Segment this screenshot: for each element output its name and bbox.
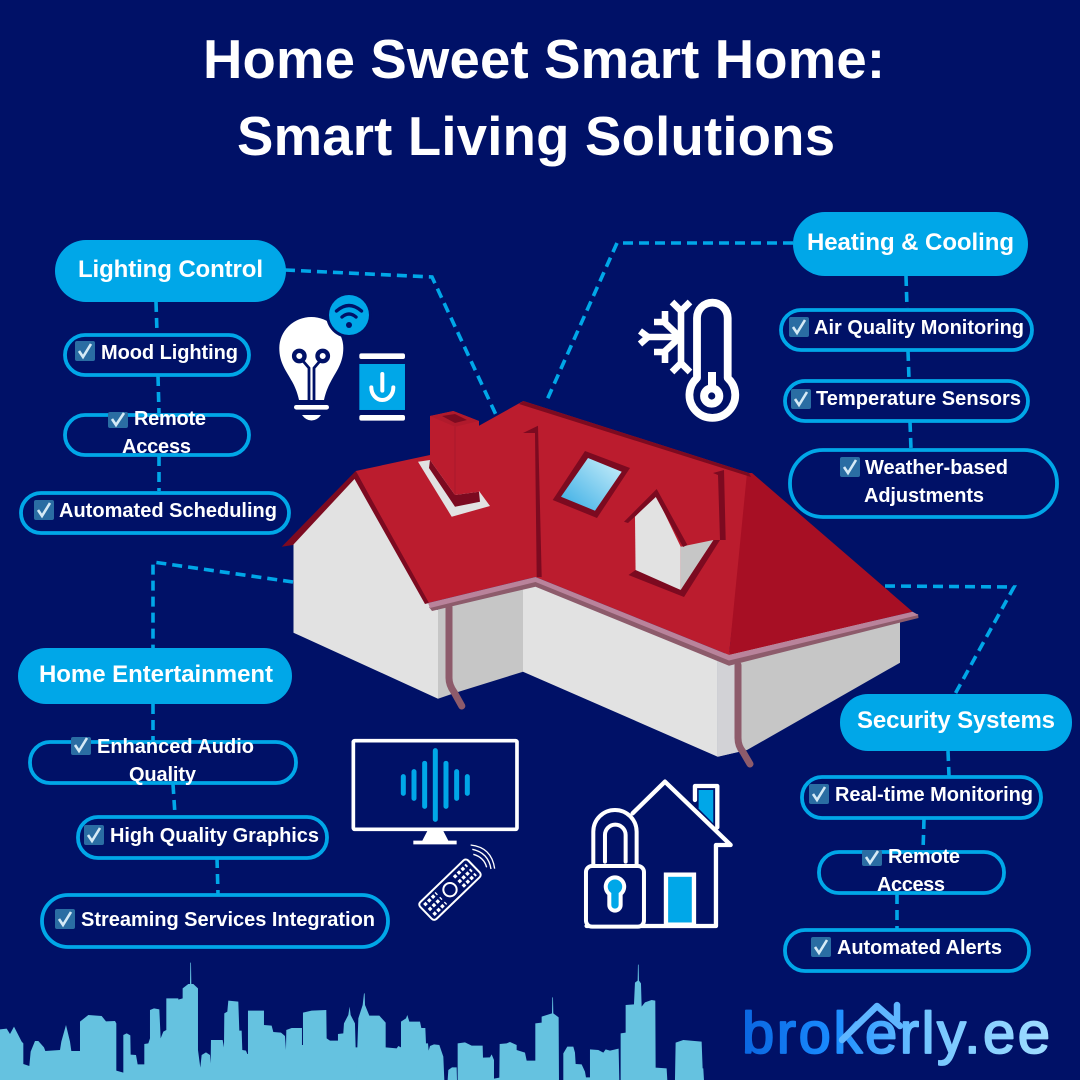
heading: lighting control — [55, 240, 286, 302]
left gable wall — [294, 476, 438, 699]
item: remote access: Remote — [888, 846, 960, 868]
downpipe left — [449, 607, 462, 706]
title: Smart Living Solutions — [237, 106, 835, 167]
panel: security systems — [785, 694, 1072, 971]
icon: snowflake thermometer — [640, 302, 735, 418]
item: mood lighting — [65, 335, 249, 375]
title: Home Sweet Smart Home: — [203, 29, 885, 90]
bulb — [279, 317, 343, 420]
item: air quality monitoring — [781, 310, 1032, 350]
item: weather-based adjustments: Weather-based — [865, 457, 1008, 479]
item: high quality graphics: High Quality Graphics — [110, 825, 319, 847]
sound wave — [403, 751, 467, 819]
corner trim — [718, 660, 738, 757]
roof hip face — [729, 473, 913, 655]
chimney — [429, 411, 480, 507]
snowflake — [640, 302, 690, 372]
tv screen — [353, 741, 517, 829]
house illustration — [282, 401, 918, 764]
tv stand — [413, 831, 457, 844]
skylight — [553, 451, 630, 518]
chimney flashing — [418, 460, 490, 517]
remote control — [418, 858, 482, 921]
item: streaming services integration — [42, 895, 388, 947]
icon: tv with remote — [353, 741, 517, 921]
panel: lighting control — [21, 240, 289, 533]
heading: heating and cooling: Heating & Cooling — [807, 229, 1014, 256]
heading: home entertainment — [18, 648, 292, 704]
item: remote access — [819, 846, 1004, 896]
heading: security systems: Security Systems — [857, 707, 1055, 734]
heading: heating and cooling — [793, 212, 1028, 276]
item: automated alerts: Automated Alerts — [837, 937, 1002, 959]
dashed connector lines — [153, 243, 1014, 929]
item: mood lighting: Mood Lighting — [101, 342, 238, 364]
item: automated alerts — [785, 930, 1029, 971]
phone — [359, 353, 405, 421]
item: weather-based adjustments — [790, 450, 1057, 517]
dormer — [624, 470, 726, 597]
roof main surface — [356, 401, 749, 655]
heading: home entertainment: Home Entertainment — [39, 661, 273, 688]
item: temperature sensors — [785, 381, 1028, 421]
item: automated scheduling: Automated Scheduling — [59, 500, 277, 522]
item: remote access: Access — [877, 874, 945, 896]
skyline — [0, 963, 704, 1080]
item: enhanced audio quality: Quality — [129, 764, 197, 786]
panel: home entertainment — [18, 648, 388, 947]
item: streaming services integration: Streaming Services Integration — [81, 909, 375, 931]
padlock — [586, 810, 644, 927]
item: remote access — [65, 408, 249, 458]
item: high quality graphics — [78, 817, 327, 858]
item: real-time monitoring: Real-time Monitoring — [835, 784, 1033, 806]
panel: heating and cooling — [781, 212, 1057, 517]
right wall — [718, 615, 900, 757]
remote signal — [471, 845, 495, 869]
recessed side wall — [438, 582, 523, 699]
item: air quality monitoring: Air Quality Monitoring — [814, 317, 1024, 339]
item: remote access: Access — [122, 436, 191, 458]
thermometer — [689, 303, 735, 418]
central valley — [523, 426, 542, 577]
item: enhanced audio quality: Enhanced Audio — [97, 736, 254, 758]
title — [203, 29, 885, 167]
item: automated scheduling — [21, 493, 289, 533]
item: real-time monitoring — [802, 777, 1041, 818]
item: remote access: Remote — [134, 408, 206, 430]
roof ridge edge — [519, 401, 751, 477]
heading: lighting control: Lighting Control — [78, 256, 263, 283]
wifi badge — [326, 292, 372, 338]
item: enhanced audio quality — [30, 736, 296, 786]
heading: security systems — [840, 694, 1072, 751]
left gable edge — [282, 471, 429, 604]
logo: brokerly.ee: brokerly.ee — [742, 1001, 1050, 1066]
item: weather-based adjustments: Adjustments — [864, 485, 984, 507]
gutter — [428, 577, 918, 666]
front wall — [523, 580, 718, 757]
item: temperature sensors: Temperature Sensors — [816, 388, 1021, 410]
icon: smart bulb with wifi and phone — [279, 292, 405, 421]
icon: house with padlock — [586, 782, 731, 927]
downpipe right — [738, 665, 750, 764]
